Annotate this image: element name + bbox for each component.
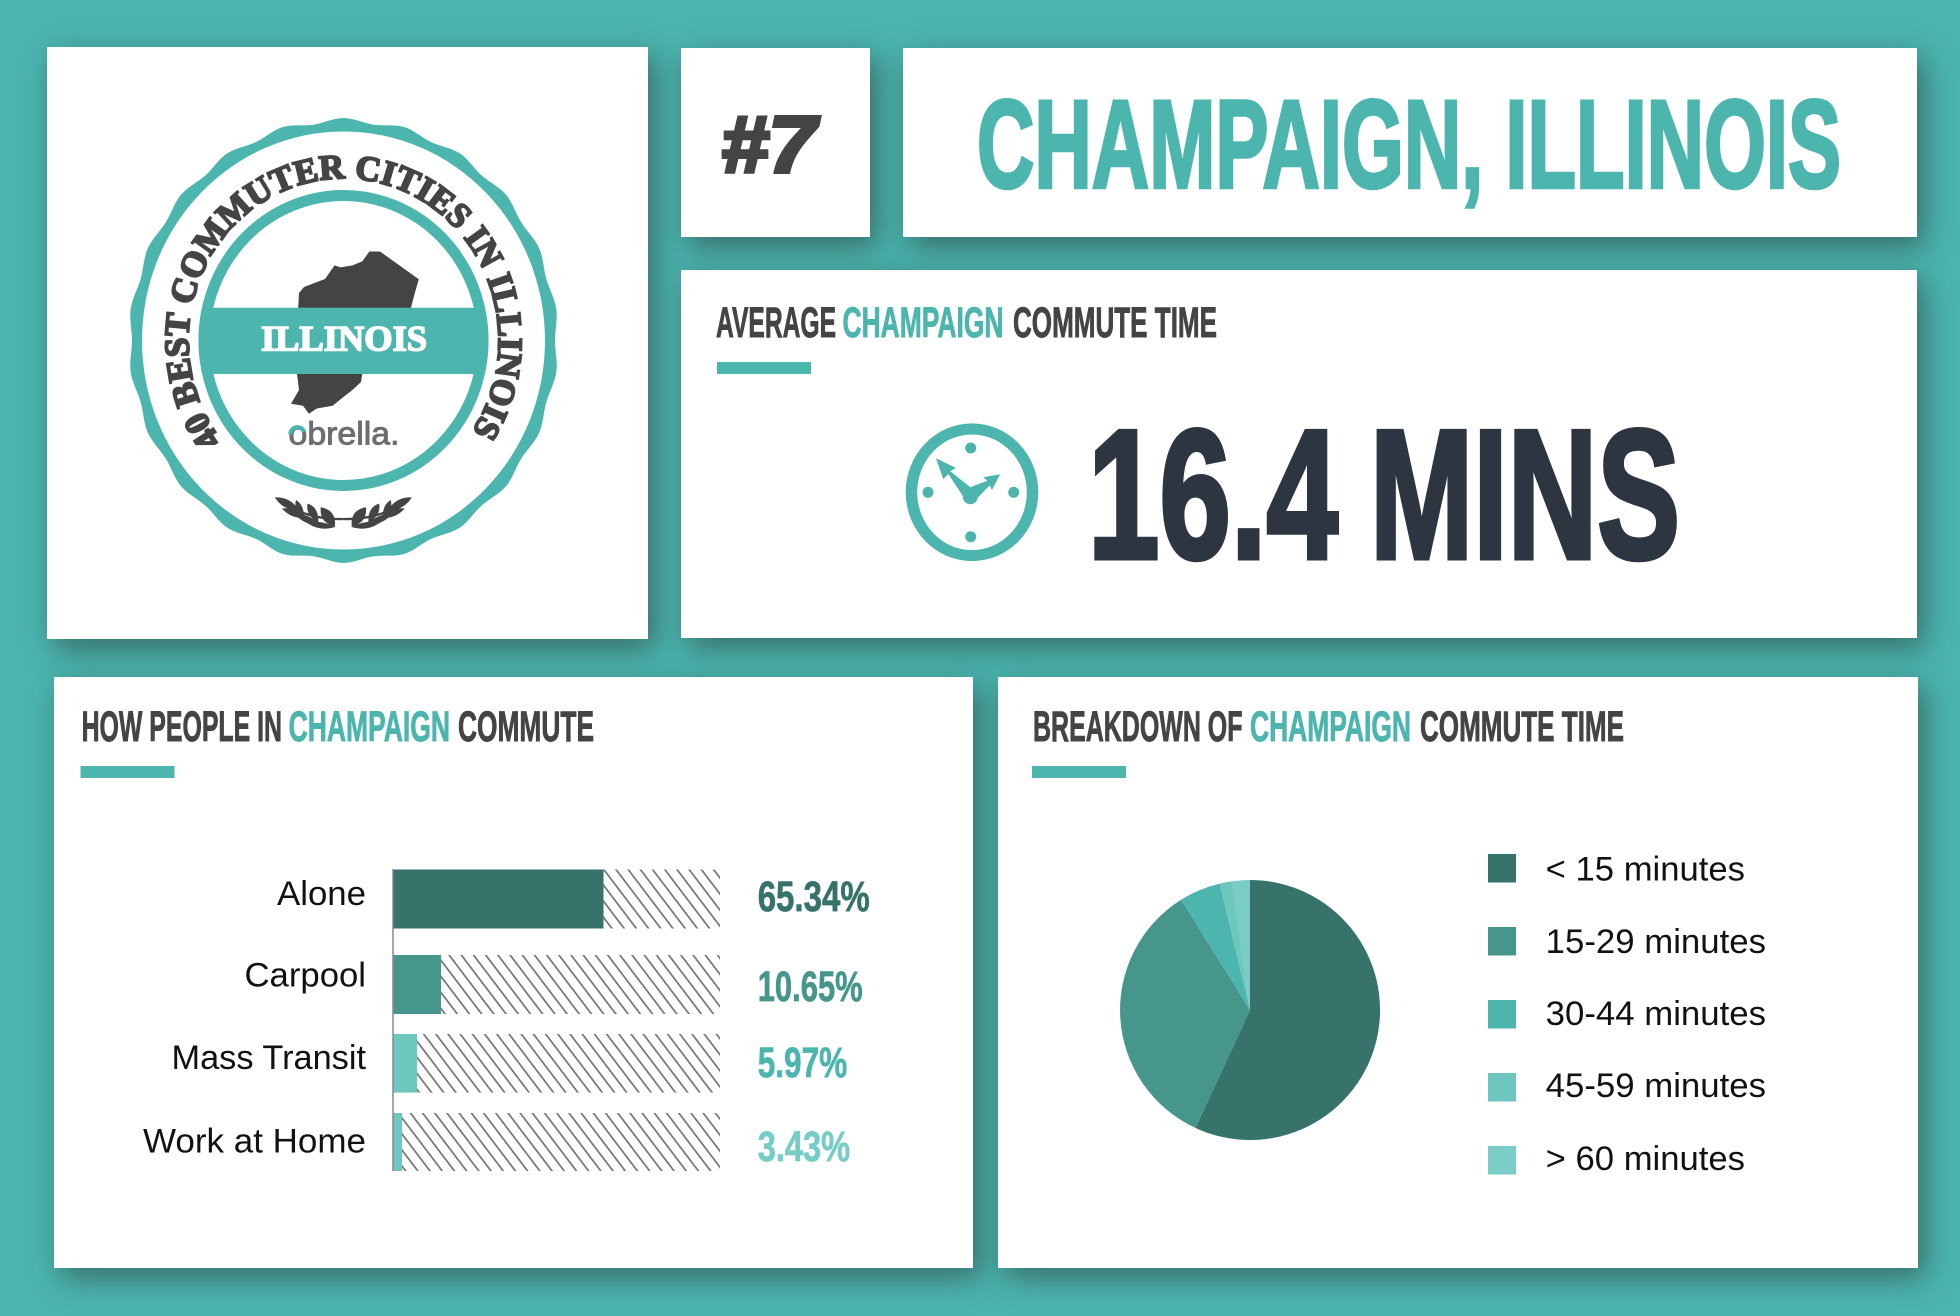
heading: BREAKDOWN OF bbox=[1033, 703, 1242, 751]
heading: AVERAGE bbox=[716, 299, 836, 347]
legend: 15-29 minutes bbox=[1546, 923, 1766, 961]
heading bbox=[1033, 703, 1624, 751]
legend bbox=[1488, 850, 1766, 1178]
icon: clock bbox=[906, 423, 1038, 561]
panel: city title bbox=[903, 48, 1917, 237]
row: work at home bbox=[143, 1113, 850, 1171]
row: alone bbox=[277, 870, 870, 928]
row: carpool: Carpool bbox=[244, 956, 366, 994]
panel: how people commute bbox=[54, 677, 973, 1268]
heading: COMMUTE TIME bbox=[1420, 703, 1624, 751]
heading: CHAMPAIGN bbox=[1250, 703, 1411, 751]
panel: commute time breakdown bbox=[998, 677, 1918, 1268]
heading: CHAMPAIGN bbox=[289, 703, 450, 751]
legend: 45-59 minutes bbox=[1546, 1067, 1766, 1105]
heading: HOW PEOPLE IN bbox=[82, 703, 282, 751]
row: alone: Alone bbox=[277, 875, 366, 913]
rank number: #7 bbox=[721, 100, 820, 189]
heading: CHAMPAIGN bbox=[842, 299, 1004, 347]
legend: < 15 minutes bbox=[1546, 850, 1745, 888]
heading underline bbox=[80, 766, 174, 778]
heading bbox=[716, 299, 1217, 347]
panel: average commute time bbox=[681, 270, 1917, 638]
bar chart bbox=[143, 869, 870, 1171]
big number bbox=[1088, 391, 1680, 597]
heading underline bbox=[717, 362, 811, 374]
scalloped outer edge bbox=[130, 118, 557, 563]
row: mass transit: Mass Transit bbox=[172, 1039, 367, 1077]
row: alone: 65.34% bbox=[758, 873, 870, 921]
heading underline bbox=[1032, 766, 1126, 778]
heading: COMMUTE TIME bbox=[1013, 299, 1217, 347]
state name banner bbox=[190, 308, 500, 374]
state name banner: ILLINOIS bbox=[261, 318, 427, 358]
pie chart bbox=[1120, 880, 1380, 1140]
row: carpool: 10.65% bbox=[758, 963, 863, 1011]
icon: Illinois state silhouette bbox=[291, 252, 419, 414]
heading: COMMUTE bbox=[458, 703, 594, 751]
row: mass transit: 5.97% bbox=[758, 1039, 847, 1087]
curved badge text: 40 BEST COMMUTER CITIES IN ILLINOIS bbox=[164, 155, 522, 446]
logo: obrella: obrella. bbox=[288, 415, 400, 451]
panel: rank bbox=[681, 48, 870, 237]
row: mass transit bbox=[172, 1034, 847, 1093]
icon: laurel bbox=[277, 498, 410, 528]
panel: badge bbox=[47, 47, 648, 639]
big number: MINS bbox=[1370, 391, 1680, 597]
legend: > 60 minutes bbox=[1546, 1140, 1745, 1178]
big number: 16.4 bbox=[1088, 391, 1338, 597]
row: work at home: 3.43% bbox=[758, 1123, 850, 1171]
row: work at home: Work at Home bbox=[143, 1123, 366, 1161]
row: carpool bbox=[244, 955, 863, 1014]
inner ring bbox=[204, 196, 483, 486]
icon: commuter cities badge bbox=[130, 118, 557, 563]
heading bbox=[82, 703, 594, 751]
legend: 30-44 minutes bbox=[1546, 995, 1766, 1033]
